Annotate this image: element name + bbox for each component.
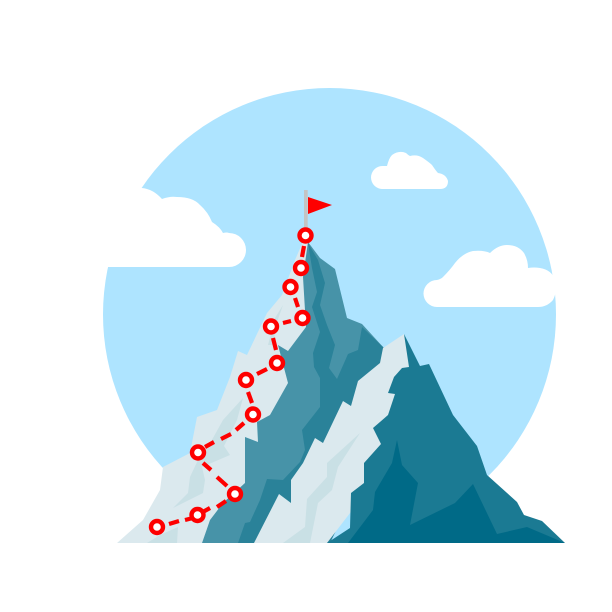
mountain: right snow face <box>254 334 412 543</box>
mountain: central dark shadow <box>238 243 400 543</box>
mountain: left snow face <box>117 237 313 543</box>
flag <box>304 190 332 232</box>
cloud: medium right <box>423 245 556 307</box>
climbing route dashes <box>169 246 304 524</box>
cloud: large left <box>95 188 246 267</box>
cloud: small top right <box>371 152 448 189</box>
snow shading: right face <box>283 433 360 543</box>
mountain: right peak deep shadow <box>348 440 565 543</box>
climbing route waypoints <box>151 230 312 533</box>
mountain: right peak <box>327 334 565 543</box>
flag pole <box>304 190 308 232</box>
mountain: central teal face <box>202 242 390 543</box>
flag pennant <box>308 197 332 214</box>
sky circle <box>103 88 556 541</box>
snow shading: left face <box>147 305 283 543</box>
